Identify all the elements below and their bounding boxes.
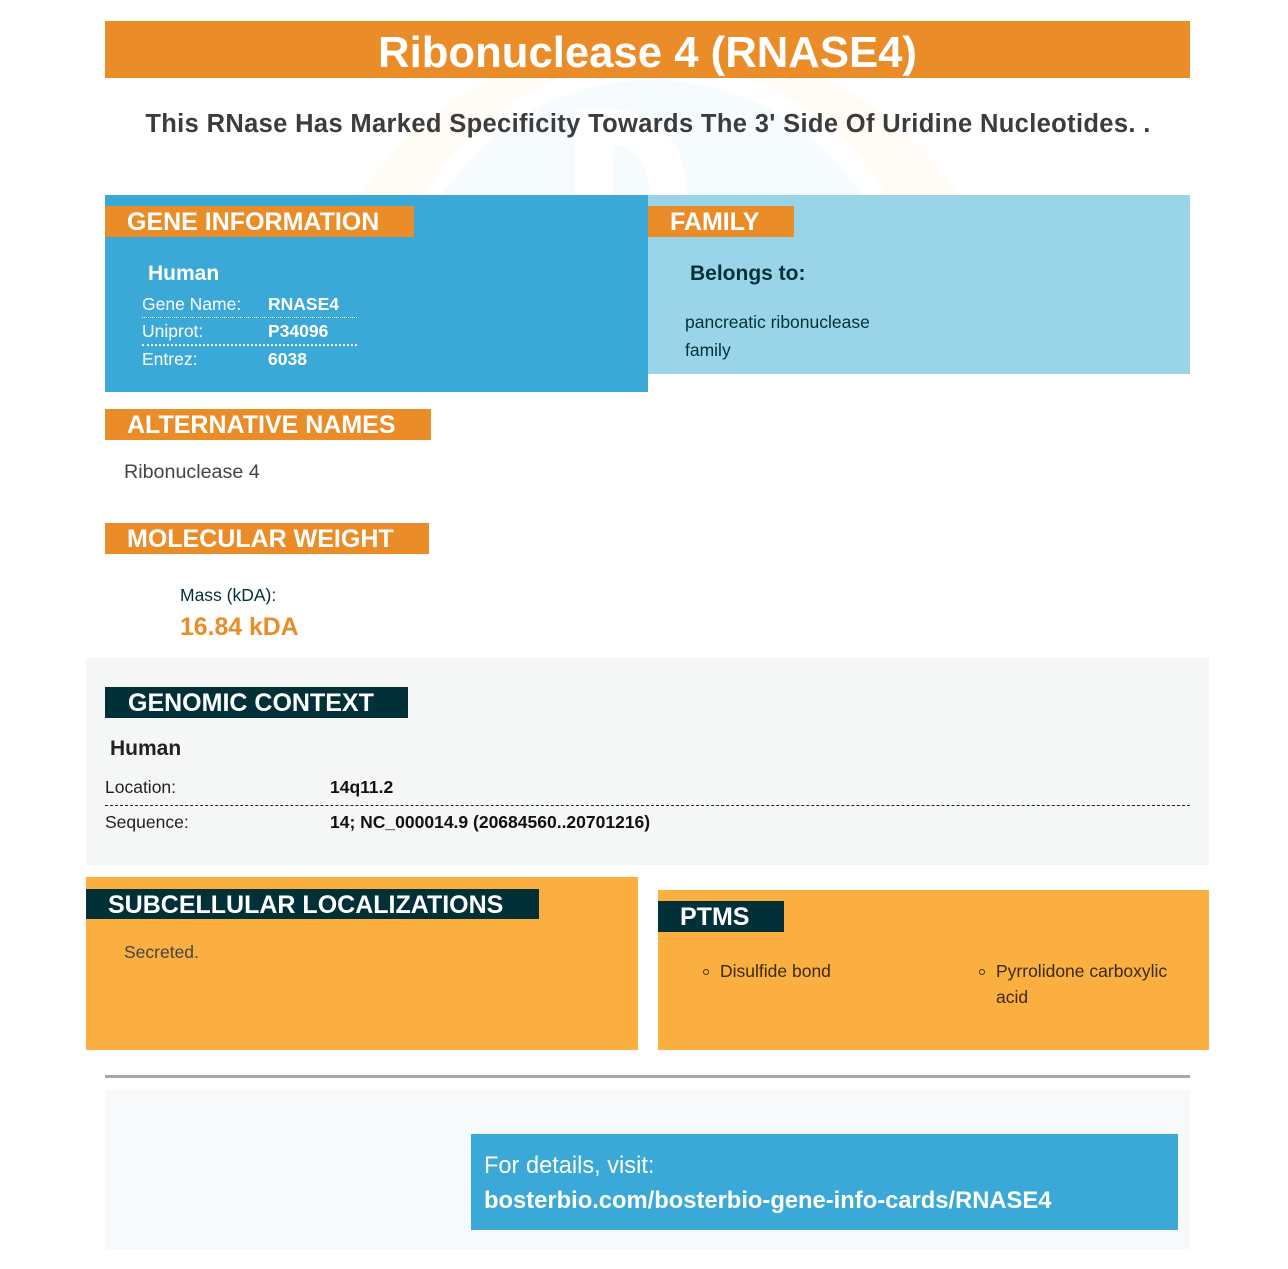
panel: subcellular localizations <box>86 877 638 1050</box>
title banner <box>105 21 1190 78</box>
sequence row: Sequence: <box>105 812 189 832</box>
ptm item: pyrrolidone carboxylic acid: Pyrrolidone carboxylic <box>996 961 1167 981</box>
panel: gene information <box>105 195 648 392</box>
gene table <box>142 294 357 369</box>
heading: ptms <box>658 901 784 932</box>
mass label: Mass (kDA): <box>180 585 276 605</box>
gene table: Uniprot: <box>142 321 203 341</box>
heading: subcellular localizations: SUBCELLULAR LOCALIZATIONS <box>108 891 503 919</box>
ptm item: pyrrolidone carboxylic acid: acid <box>996 987 1028 1007</box>
location row: 14q11.2 <box>330 777 393 797</box>
heading: family <box>648 206 794 237</box>
ptm item: pyrrolidone carboxylic acid <box>979 961 1167 1007</box>
panel: family <box>648 195 1190 374</box>
heading: ptms: PTMS <box>680 903 749 931</box>
belongs to label: Belongs to: <box>690 262 806 285</box>
gene table: P34096 <box>268 321 328 341</box>
title banner: Ribonuclease 4 (RNASE4) <box>378 28 917 77</box>
sequence row <box>105 812 650 832</box>
callout: details link: For details, visit: <box>484 1153 654 1179</box>
callout: details link <box>471 1134 1178 1230</box>
gene table: RNASE4 <box>268 294 339 314</box>
panel: ptms <box>658 890 1209 1050</box>
location row: Location: <box>105 777 176 797</box>
heading: gene information: GENE INFORMATION <box>127 208 379 236</box>
gene table: 6038 <box>268 349 307 369</box>
panel: footer <box>105 1090 1190 1249</box>
mass value: 16.84 kDA <box>180 614 299 641</box>
subtitle: This RNase Has Marked Specificity Towards The 3' Side Of Uridine Nucleotides. . <box>145 110 1151 138</box>
localization text: Secreted. <box>124 942 199 962</box>
ptm item: disulfide bond: Disulfide bond <box>720 961 831 981</box>
sequence row: 14; NC_000014.9 (20684560..20701216) <box>330 812 650 832</box>
species label: Human <box>148 262 219 285</box>
gene table: Entrez: <box>142 349 197 369</box>
callout: details link: bosterbio.com/bosterbio-gene-info-cards/RNASE4 <box>484 1187 1051 1214</box>
watermark logo <box>360 78 958 195</box>
heading: alternative names: ALTERNATIVE NAMES <box>127 411 396 439</box>
alternative names text: Ribonuclease 4 <box>124 461 260 483</box>
heading: family: FAMILY <box>670 208 759 236</box>
location row <box>105 777 393 797</box>
heading: molecular weight: MOLECULAR WEIGHT <box>127 525 394 553</box>
panel: genomic context <box>86 658 1209 865</box>
species label: Human <box>110 737 181 760</box>
gene table: Gene Name: <box>142 294 241 314</box>
family name: pancreatic ribonuclease family <box>685 312 870 360</box>
heading: genomic context: GENOMIC CONTEXT <box>128 689 374 717</box>
